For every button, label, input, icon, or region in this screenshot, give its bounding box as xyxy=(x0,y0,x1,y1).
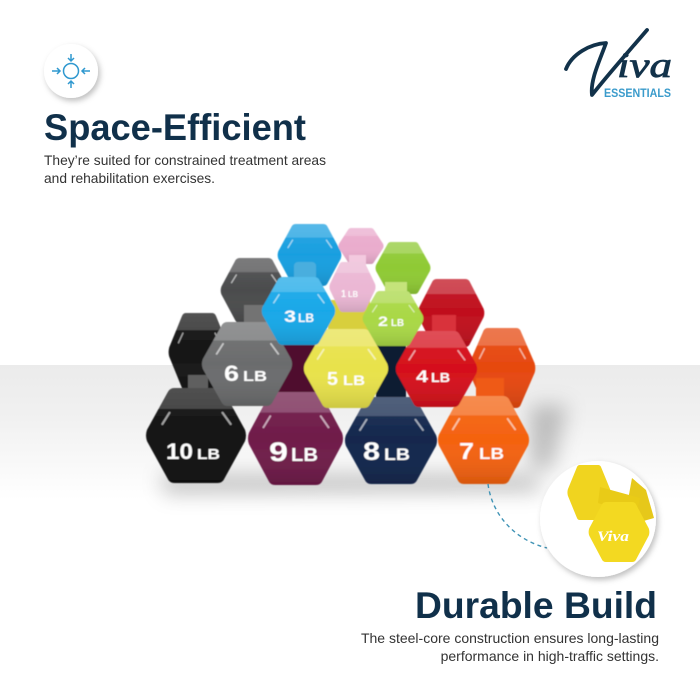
dumbbell: 3 LB back xyxy=(278,224,341,288)
text block: durable build description: performance in high-traffic settings. xyxy=(441,648,659,664)
dumbbell: 10 LB back xyxy=(169,313,229,395)
dumbbell: 8 LB xyxy=(345,397,437,484)
logo: Viva Essentials xyxy=(566,30,672,100)
dumbbell: 2 LB: LB xyxy=(391,318,404,329)
dumbbell: 9 LB xyxy=(248,392,343,485)
inset dumbbell: handle xyxy=(598,487,640,515)
dumbbell stack xyxy=(146,224,535,485)
dumbbell: 4 LB xyxy=(396,331,477,407)
text block: space-efficient description: and rehabilitation exercises. xyxy=(44,170,215,186)
dumbbell: 6 LB: LB xyxy=(243,368,267,385)
dumbbell: 10 LB: 10 xyxy=(166,439,193,464)
heading: Durable Build: Durable Build xyxy=(415,585,657,626)
dumbbell: 7 LB: 7 xyxy=(459,438,474,464)
dumbbell: 5 LB back xyxy=(328,300,370,340)
floor shadows xyxy=(160,405,568,494)
dumbbell: 2 LB back xyxy=(376,242,430,294)
dumbbell: 10 LB: LB xyxy=(197,446,220,463)
dumbbell: 9 LB: 9 xyxy=(269,437,288,467)
inset dumbbell: front head xyxy=(589,502,649,562)
dumbbell: 1 LB: LB xyxy=(348,290,358,299)
dumbbell: 1 LB handle xyxy=(349,255,366,279)
dumbbell: 4 LB: LB xyxy=(431,370,450,385)
dumbbell: 6 LB back xyxy=(221,258,287,329)
dumbbell: 10 LB xyxy=(146,388,246,483)
dumbbell: 2 LB: 2 xyxy=(378,313,388,329)
inset dumbbell: back head xyxy=(567,465,611,520)
dumbbell: 7 LB: LB xyxy=(479,446,504,463)
dumbbell: 9 LB: LB xyxy=(291,445,318,465)
dumbbell: 6 LB: 6 xyxy=(224,361,239,386)
text block: durable build description: The steel-core construction ensures long-lasting xyxy=(361,630,659,646)
dumbbell: 1 LB: 1 xyxy=(341,289,346,300)
logo: Viva Essentials: iva xyxy=(617,45,672,85)
connector: dashed curve xyxy=(488,484,547,548)
icon: compress arrows badge xyxy=(44,44,98,98)
heading: Space-Efficient: Space-Efficient xyxy=(44,107,306,148)
dumbbell: 1 LB back xyxy=(338,228,384,264)
dumbbell: 4 LB: 4 xyxy=(416,367,429,386)
dumbbell: 7 LB back xyxy=(469,328,535,408)
dumbbell: 2 LB xyxy=(363,291,423,346)
dumbbell: 5 LB: 5 xyxy=(327,369,338,389)
dumbbell: 5 LB xyxy=(304,329,388,408)
dumbbell: 9 LB back xyxy=(278,342,318,396)
dumbbell: 6 LB xyxy=(202,322,292,406)
logo: Viva Essentials: ESSENTIALS xyxy=(604,88,671,100)
dumbbell: 8 LB: LB xyxy=(384,445,410,464)
floor band xyxy=(0,365,700,500)
inset dumbbell: rear xyxy=(628,478,654,522)
dumbbell: 5 LB: LB xyxy=(343,372,365,388)
text block: space-efficient description xyxy=(44,152,326,186)
dumbbell: 1 LB xyxy=(329,262,376,312)
dumbbell: 7 LB xyxy=(438,396,529,484)
dumbbell: 3 LB: 3 xyxy=(284,307,296,326)
text block: space-efficient description: They’re suited for constrained treatment areas xyxy=(44,152,326,168)
dumbbell: 4 LB back xyxy=(418,279,484,347)
inset dumbbell: brand mark: Viva xyxy=(597,529,630,545)
dumbbell: 3 LB xyxy=(262,277,335,345)
dumbbell: 8 LB: 8 xyxy=(363,438,380,466)
dumbbell: 2 LB handle xyxy=(385,282,407,300)
dumbbell: 3 LB: LB xyxy=(298,311,314,325)
inset: yellow dumbbell close-up xyxy=(540,461,656,577)
dumbbell: 8 LB back xyxy=(376,342,406,400)
text block: durable build description xyxy=(361,630,659,664)
